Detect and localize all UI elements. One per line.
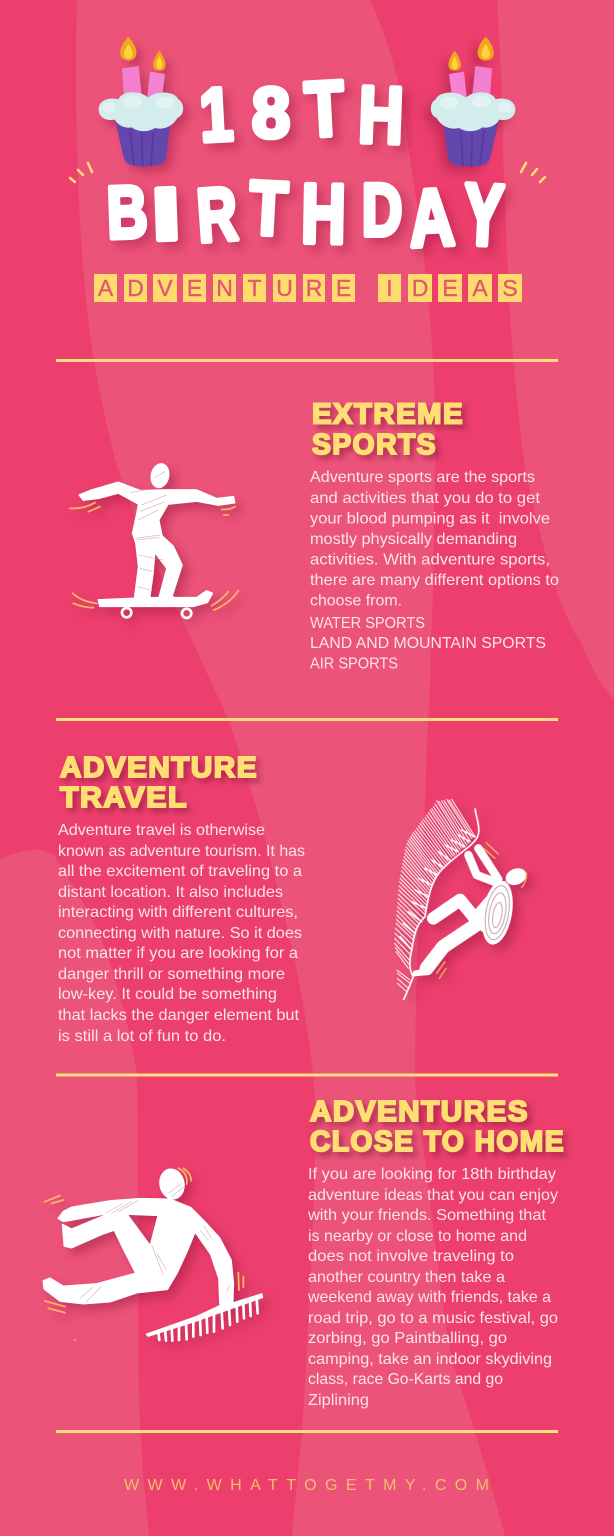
text: close to home body: does not involve traveling to xyxy=(308,1248,514,1265)
title: birthday: D xyxy=(362,169,402,251)
icon: skateboard trick xyxy=(43,1166,262,1341)
heading: adventures close to home xyxy=(310,1096,565,1158)
text: extreme sports body: LAND AND MOUNTAIN SPORTS xyxy=(310,635,546,652)
subtitle: adventure ideas: D xyxy=(127,275,144,301)
cupcake right xyxy=(431,37,515,167)
text: adventure travel body: is still a lot of fun to do. xyxy=(58,1028,226,1045)
subtitle: adventure ideas: N xyxy=(216,275,233,301)
text: close to home body: weekend away with friends, take a xyxy=(307,1289,551,1306)
text: extreme sports body: mostly physically demanding xyxy=(310,531,517,548)
subtitle: adventure ideas: A xyxy=(472,275,488,301)
sparkle dashes right xyxy=(521,163,545,182)
text: extreme sports body: Adventure sports are the sports xyxy=(310,469,535,486)
subtitle: adventure ideas: R xyxy=(306,275,322,301)
text: adventure travel body: danger thrill or something more xyxy=(58,966,285,983)
text: adventure travel body: not matter if you are looking for a xyxy=(58,945,298,962)
heading: adventure travel xyxy=(60,752,258,814)
subtitle: adventure ideas: E xyxy=(187,275,202,301)
text: close to home body: camping, take an indoor skydiving xyxy=(308,1351,552,1368)
subtitle: adventure ideas: A xyxy=(98,275,114,301)
title: birthday xyxy=(105,165,506,265)
heading: extreme sports xyxy=(312,398,464,461)
subtitle: adventure ideas: S xyxy=(502,275,518,301)
title: birthday: A xyxy=(407,173,456,265)
title: birthday: T xyxy=(247,165,290,252)
title: birthday: Y xyxy=(461,165,506,264)
text: extreme sports body: and activities that you do to get xyxy=(310,490,541,507)
heading: extreme sports: SPORTS xyxy=(312,429,437,461)
heading: adventures close to home: CLOSE TO HOME xyxy=(310,1126,565,1158)
text: extreme sports body: there are many different options to xyxy=(310,572,559,589)
subtitle: adventure ideas: E xyxy=(336,275,351,301)
text: close to home body: class, race Go-Karts and go xyxy=(308,1371,503,1388)
text: adventure travel body: Adventure travel is otherwise xyxy=(58,822,265,839)
text: adventure travel body: connecting with nature. So it does xyxy=(58,925,302,942)
cupcake left xyxy=(99,37,183,167)
subtitle: adventure ideas: E xyxy=(442,275,458,301)
title: birthday: B xyxy=(105,170,149,254)
title: 18th: H xyxy=(357,70,405,161)
title: 18th: 8 xyxy=(252,72,290,153)
heading: extreme sports: EXTREME xyxy=(312,398,464,430)
text: close to home body: If you are looking for 18th birthday xyxy=(308,1166,556,1183)
text: adventure travel body: all the excitement of traveling to a xyxy=(58,863,302,880)
heading: adventures close to home: ADVENTURES xyxy=(310,1096,529,1128)
subtitle: adventure ideas: I xyxy=(386,275,393,301)
text: adventure travel body xyxy=(58,822,305,1045)
subtitle: adventure ideas xyxy=(94,274,522,302)
text: adventure travel body: known as adventure tourism. It has xyxy=(58,843,305,860)
heading: adventure travel: ADVENTURE xyxy=(60,752,258,784)
text: close to home body: another country then take a xyxy=(308,1269,505,1286)
title: 18th xyxy=(198,66,405,161)
text: adventure travel body: distant location. It also includes xyxy=(58,884,283,901)
text: adventure travel body: interacting with different cultures, xyxy=(58,904,298,921)
heading: adventure travel: TRAVEL xyxy=(60,782,188,814)
title: 18th: T xyxy=(303,66,346,154)
footer: website: WWW.WHATTOGETMY.COM xyxy=(124,1477,489,1494)
text: extreme sports body: WATER SPORTS xyxy=(310,615,425,632)
text: close to home body: zorbing, go Paintballing, go xyxy=(308,1330,507,1347)
text: extreme sports body xyxy=(310,469,559,672)
text: close to home body: with your friends. Something that xyxy=(307,1207,547,1224)
title: 18th: 1 xyxy=(198,73,235,158)
panel: adventures close to home xyxy=(43,1096,565,1409)
text: close to home body: adventure ideas that you can enjoy xyxy=(308,1187,558,1204)
title: birthday: H xyxy=(301,167,346,261)
text: adventure travel body: low-key. It could be something xyxy=(58,986,277,1003)
text: extreme sports body: AIR SPORTS xyxy=(310,656,398,672)
panel: extreme sports xyxy=(70,398,559,672)
text: close to home body: road trip, go to a music festival, go xyxy=(308,1310,558,1327)
subtitle: adventure ideas: D xyxy=(412,275,428,301)
title: birthday: I xyxy=(150,173,182,256)
sparkle dashes left xyxy=(70,163,92,182)
icon: rock climber xyxy=(395,799,529,1000)
subtitle: adventure ideas: U xyxy=(276,275,293,301)
subtitle: adventure ideas: T xyxy=(247,275,262,301)
icon: skateboarder xyxy=(70,461,238,618)
text: extreme sports body: your blood pumping as it involve xyxy=(310,510,550,528)
text: close to home body: is nearby or close to home and xyxy=(308,1228,527,1245)
text: close to home body xyxy=(307,1166,558,1409)
title: birthday: R xyxy=(194,172,240,259)
panel: adventure travel xyxy=(58,752,529,1045)
text: close to home body: Ziplining xyxy=(308,1392,369,1409)
text: extreme sports body: activities. With adventure sports, xyxy=(310,552,550,568)
text: adventure travel body: that lacks the danger element but xyxy=(58,1007,300,1024)
text: extreme sports body: choose from. xyxy=(310,592,402,610)
subtitle: adventure ideas: V xyxy=(157,275,173,301)
